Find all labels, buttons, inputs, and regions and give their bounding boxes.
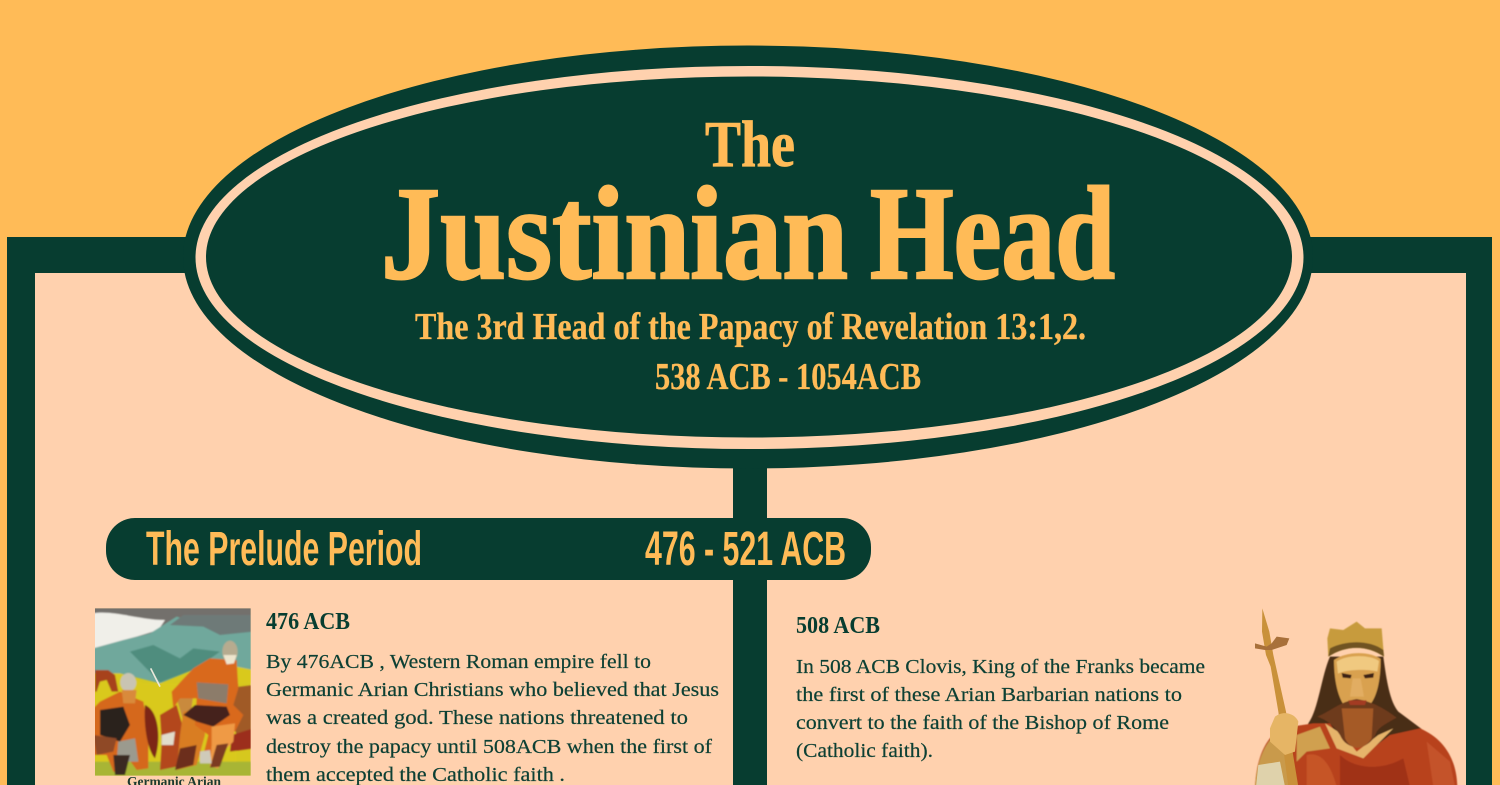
banner dates: 476 - 521 ACB	[645, 523, 846, 576]
text block: 476 ACB	[266, 609, 719, 785]
title: The: The	[705, 108, 795, 181]
date range: 538 ACB - 1054ACB	[655, 356, 921, 398]
body: 476 ACB: was a created god. These nations threatened to	[266, 707, 688, 729]
title: Justinian Head: Head	[870, 159, 1115, 307]
body: 476 ACB	[266, 651, 719, 785]
banner title: The Prelude Period	[146, 523, 422, 576]
image: King Clovis	[1255, 608, 1457, 785]
body: 508 ACB: In 508 ACB Clovis, King of the Franks became	[796, 656, 1205, 678]
panel: frame	[7, 237, 1492, 785]
period banner	[106, 518, 871, 580]
body: 508 ACB	[796, 656, 1205, 762]
heading: 508 ACB: 508 ACB	[796, 613, 880, 639]
subtitle: The 3rd Head of the Papacy of Revelation 13:1,2.	[415, 306, 1086, 348]
title oval	[183, 46, 1313, 468]
body: 508 ACB: the first of these Arian Barbarian nations to	[796, 684, 1182, 706]
body: 508 ACB: convert to the faith of the Bishop of Rome	[796, 712, 1169, 734]
body: 476 ACB: By 476ACB , Western Roman empire fell to	[266, 651, 651, 673]
body: 508 ACB: (Catholic faith).	[796, 740, 933, 762]
body: 476 ACB: Germanic Arian Christians who believed that Jesus	[266, 679, 719, 701]
title: Justinian Head: Justinian	[381, 159, 848, 307]
heading: 476 ACB: 476 ACB	[266, 609, 350, 635]
central divider	[733, 440, 767, 785]
body: 476 ACB: destroy the papacy until 508ACB when the first of	[266, 736, 712, 758]
text block: 508 ACB	[796, 613, 1205, 762]
image: Germanic Arian warriors	[93, 607, 253, 777]
